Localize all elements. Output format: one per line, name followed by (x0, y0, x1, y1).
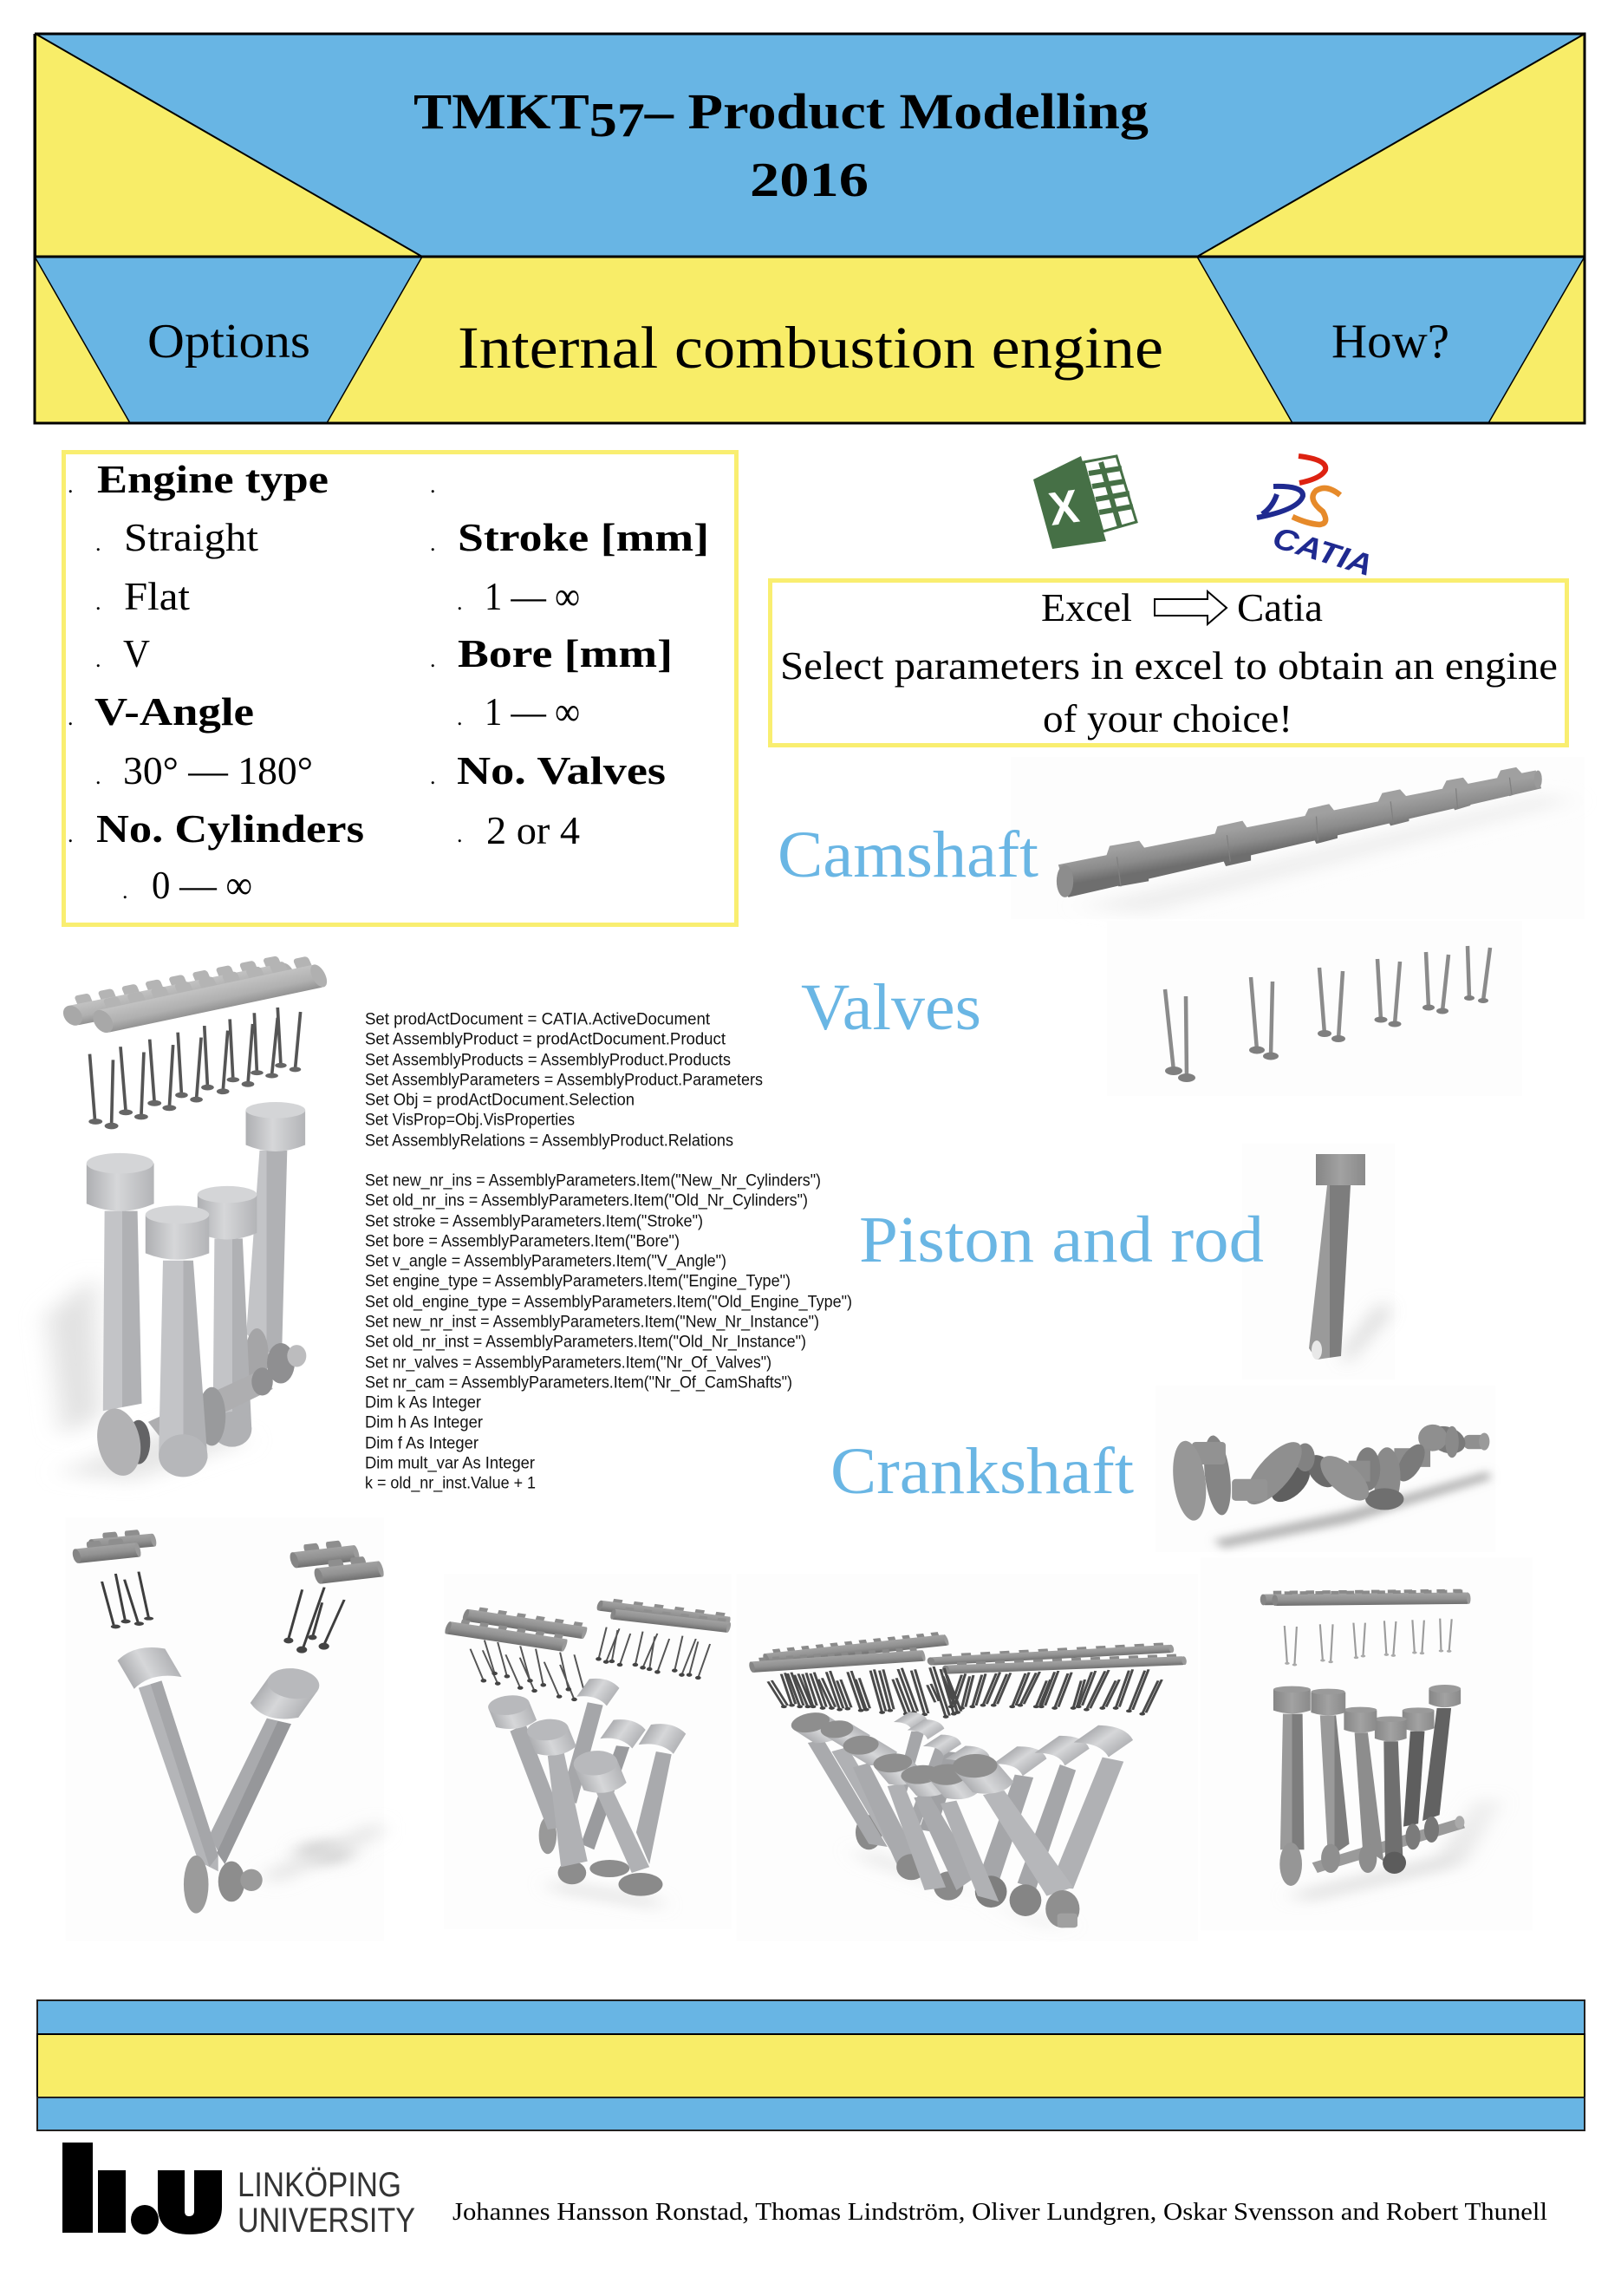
code snippet: Set AssemblyParameters = AssemblyProduct.Parameters (365, 1072, 763, 1089)
left column options: . (95, 647, 101, 672)
image: v4 engine (444, 1574, 732, 1929)
options trapezoid (35, 257, 422, 423)
pistons and rods (114, 1643, 327, 1914)
code snippet: k = old_nr_inst.Value + 1 (365, 1474, 536, 1493)
image: valves (1107, 921, 1522, 1096)
image: camshaft (1011, 757, 1585, 919)
code snippet: Set old_engine_type = AssemblyParameters.Item("Old_Engine_Type") (365, 1294, 852, 1311)
header lower band (36, 257, 1585, 423)
description text: of your choice! (1043, 697, 1292, 740)
excel to catia line: Excel (1041, 586, 1132, 629)
right column options: 1 — ∞ (485, 574, 580, 618)
code snippet: Set prodActDocument = CATIA.ActiveDocument (365, 1011, 711, 1028)
left column options: V (123, 631, 150, 675)
image: v8 engine (736, 1574, 1198, 1941)
heading: crankshaft: Crankshaft (830, 1435, 1134, 1508)
image: v-twin engine (66, 1517, 385, 1941)
code snippet: Set nr_cam = AssemblyParameters.Item("Nr_Of_CamShafts") (365, 1373, 792, 1393)
right column options: 1 — ∞ (485, 689, 580, 734)
right column options: Bore [mm] (458, 631, 673, 675)
engine subtitle: Internal combustion engine (458, 315, 1163, 381)
camshafts (70, 1529, 385, 1584)
right column options: . (457, 705, 463, 730)
left column options: . (95, 590, 101, 615)
code snippet: Set v_angle = AssemblyParameters.Item("V_Angle") (365, 1252, 726, 1271)
left column options: . (95, 531, 101, 556)
heading: piston and rod: Piston and rod (859, 1203, 1264, 1276)
left column options: . (122, 878, 128, 903)
university name: UNIVERSITY (238, 2201, 415, 2240)
how heading: How? (1331, 315, 1449, 369)
code snippet: Dim h As Integer (365, 1413, 484, 1432)
left column options: Straight (124, 515, 258, 559)
code snippet: Set AssemblyProduct = prodActDocument.Product (365, 1030, 726, 1049)
options heading: Options (147, 315, 310, 369)
left column options: 0 — ∞ (152, 863, 252, 907)
pistons and rods (87, 1102, 306, 1477)
code snippet: Dim f As Integer (365, 1434, 479, 1453)
right column options: . (430, 647, 435, 672)
header frame (35, 34, 1585, 423)
camshafts (747, 1631, 1187, 1674)
code snippet: Dim mult_var As Integer (365, 1455, 536, 1472)
university name (238, 2166, 415, 2240)
authors: Johannes Hansson Ronstad, Thomas Lindström, Oliver Lundgren, Oskar Svensson and Robert Thunell (452, 2198, 1547, 2226)
code snippet: Set AssemblyProducts = AssemblyProduct.Products (365, 1051, 731, 1070)
camshafts (444, 1597, 732, 1652)
code snippet: Set old_nr_inst = AssemblyParameters.Item("Old_Nr_Instance") (365, 1334, 806, 1351)
code snippet: Dim k As Integer (365, 1394, 482, 1412)
code snippet: Set nr_valves = AssemblyParameters.Item("Nr_Of_Valves") (365, 1354, 771, 1372)
pistons and rods (1273, 1685, 1465, 1886)
code snippet: Set VisProp=Obj.VisProperties (365, 1112, 575, 1129)
title trapezoid (36, 34, 1585, 257)
image: straight four assembly (47, 954, 330, 1481)
heading: camshaft: Camshaft (778, 819, 1038, 891)
left column options: . (68, 473, 73, 498)
code snippet: Set engine_type = AssemblyParameters.Item("Engine_Type") (365, 1273, 791, 1290)
left column options: . (68, 822, 73, 847)
title: – Product Modelling (644, 83, 1149, 140)
valves (768, 1667, 1162, 1717)
icon: excel logo (1033, 456, 1136, 549)
title: 57 (589, 94, 645, 147)
description text (780, 644, 1558, 740)
right column options: . (457, 590, 463, 615)
code snippet (365, 1011, 852, 1493)
image: straight six engine (1201, 1558, 1533, 1931)
icon: catia logo: CATIA (1269, 520, 1377, 583)
valves (102, 1572, 344, 1654)
university name: LINKÖPING (238, 2166, 401, 2204)
footer colour bars (37, 2000, 1585, 2130)
description text: Select parameters in excel to obtain an engine (780, 644, 1558, 688)
right column options: No. Valves (457, 748, 666, 793)
camshafts (56, 954, 330, 1034)
pistons and rods (485, 1675, 688, 1896)
right column options: . (457, 822, 463, 847)
right column options (430, 473, 709, 852)
valves (471, 1627, 710, 1699)
code snippet: Set stroke = AssemblyParameters.Item("Stroke") (365, 1212, 703, 1231)
code snippet: Set new_nr_ins = AssemblyParameters.Item("New_Nr_Cylinders") (365, 1172, 821, 1190)
right column options: . (430, 764, 435, 789)
logo: linkoping university (62, 2143, 415, 2240)
how trapezoid (1197, 257, 1585, 423)
right column options: Stroke [mm] (458, 515, 709, 559)
code snippet: Set Obj = prodActDocument.Selection (365, 1091, 635, 1110)
title: 2016 (750, 153, 869, 207)
header upper band (36, 34, 1585, 257)
catia label: Catia (1237, 586, 1323, 629)
code snippet: Set new_nr_inst = AssemblyParameters.Item("New_Nr_Instance") (365, 1313, 819, 1332)
title (413, 83, 1149, 207)
panel: options list (64, 453, 737, 924)
left column options: . (95, 764, 101, 789)
left column options (68, 457, 364, 907)
valves (88, 1008, 301, 1129)
logo mark (62, 2143, 222, 2234)
header banner (35, 34, 1585, 423)
left column options: Engine type (97, 457, 329, 501)
arrow: excel to catia (1155, 591, 1227, 624)
code snippet: Set old_nr_ins = AssemblyParameters.Item("Old_Nr_Cylinders") (365, 1191, 808, 1210)
valves (1285, 1619, 1452, 1665)
title: TMKT (413, 83, 567, 140)
code snippet: Set AssemblyRelations = AssemblyProduct.Relations (365, 1132, 733, 1150)
heading: valves: Valves (801, 971, 981, 1044)
right column options: . (430, 473, 435, 498)
right column options: 2 or 4 (486, 808, 580, 852)
icon: excel logo: X (1045, 480, 1082, 536)
left column options: . (68, 705, 73, 730)
right column options: . (430, 531, 435, 556)
icon: catia logo (1257, 456, 1377, 583)
code snippet: Set bore = AssemblyParameters.Item("Bore") (365, 1233, 680, 1250)
left column options: V-Angle (94, 689, 254, 734)
left column options: 30° — 180° (123, 748, 313, 793)
pistons and rods (784, 1708, 1138, 1927)
camshafts (1260, 1589, 1471, 1606)
left column options: Flat (124, 574, 190, 618)
left column options: No. Cylinders (96, 806, 364, 851)
image: crankshaft (1156, 1386, 1495, 1552)
panel: how description (770, 581, 1567, 746)
image: piston and rod (1242, 1144, 1395, 1380)
